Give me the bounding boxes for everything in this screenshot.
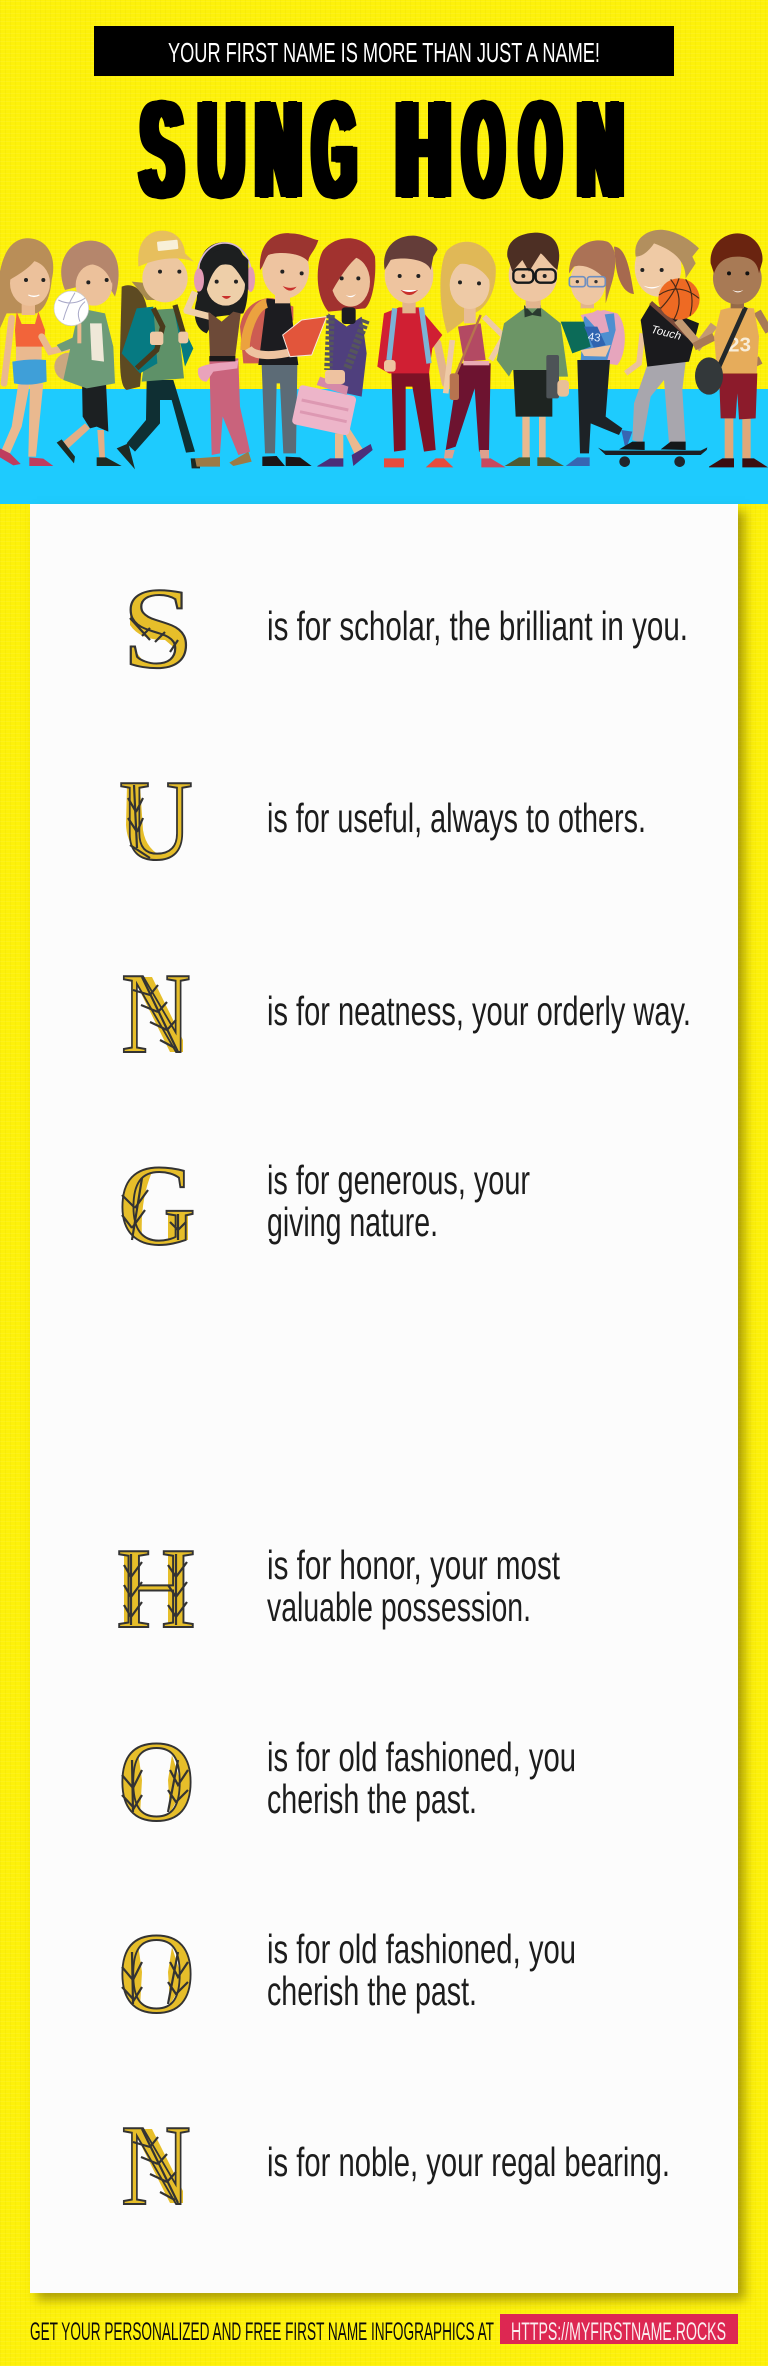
- text: G meaning: is for generous, your: [267, 1157, 530, 1203]
- row: G: giving nature.: [267, 1199, 438, 1245]
- text: H meaning: is for honor, your most: [267, 1542, 560, 1588]
- title: name: H: [397, 73, 450, 227]
- row: G: [118, 1142, 530, 1270]
- student 11: boy on skateboard with basketball: [598, 230, 714, 467]
- panel: letter meanings: [30, 504, 738, 2293]
- student 10: girl with ponytail and book: 43: [587, 331, 601, 345]
- row: U: [119, 757, 646, 885]
- student 1: girl in orange top: [0, 238, 73, 466]
- icon: wheat letter O: O: [118, 1910, 195, 2038]
- student 3: boy with cap and backpack: [117, 231, 200, 469]
- student 12: boy in number 23 jersey: [694, 233, 768, 467]
- student 10: girl with ponytail and book: [561, 240, 634, 466]
- text: O meaning: is for old fashioned, you: [267, 1734, 576, 1780]
- title: name: O: [463, 73, 504, 227]
- title: name: G: [313, 73, 356, 227]
- icon: wheat letter G: G: [118, 1142, 196, 1270]
- student 4: girl with headphones: [187, 242, 255, 467]
- icon: wheat letter H: H: [116, 1525, 196, 1653]
- student 8: blonde girl with bag: [440, 242, 506, 467]
- icon: wheat letter O: O: [118, 1718, 195, 1846]
- student 12: boy in number 23 jersey: 23: [728, 334, 751, 357]
- title: name: U: [199, 73, 244, 227]
- icon: wheat letter N: N: [121, 950, 191, 1078]
- row: N second: [121, 2102, 670, 2230]
- student 7: boy in red shirt: [377, 236, 453, 467]
- title: name: N: [578, 73, 623, 227]
- row: H: [116, 1525, 560, 1653]
- icon: wheat letter S: S: [122, 565, 194, 693]
- row: O second: cherish the past.: [267, 1968, 477, 2014]
- row: O second: [118, 1910, 576, 2038]
- student 2: girl with volleyball: [54, 241, 122, 466]
- row: O: [118, 1718, 576, 1846]
- row: H: valuable possession.: [267, 1584, 531, 1630]
- row: N: [121, 950, 691, 1078]
- title: name: N: [256, 73, 301, 227]
- student 11: boy on skateboard with basketball: Touch: [650, 324, 682, 343]
- blue floor band: [0, 389, 768, 504]
- illustration: group of students: [0, 230, 768, 470]
- row: S: [122, 565, 688, 693]
- title: name: [137, 73, 624, 227]
- student 9: boy with glasses and laptop: [497, 233, 569, 466]
- title: name: S: [141, 73, 182, 227]
- icon: wheat letter N: N: [121, 2102, 191, 2230]
- subtitle banner: [94, 26, 674, 76]
- student 6: girl carrying pink case: [291, 238, 375, 467]
- text: O meaning: is for old fashioned, you: [267, 1926, 576, 1972]
- title: name: O: [520, 73, 561, 227]
- icon: wheat letter U: U: [119, 757, 193, 885]
- student 5: boy reading a book: [240, 233, 327, 466]
- row: O: cherish the past.: [267, 1776, 477, 1822]
